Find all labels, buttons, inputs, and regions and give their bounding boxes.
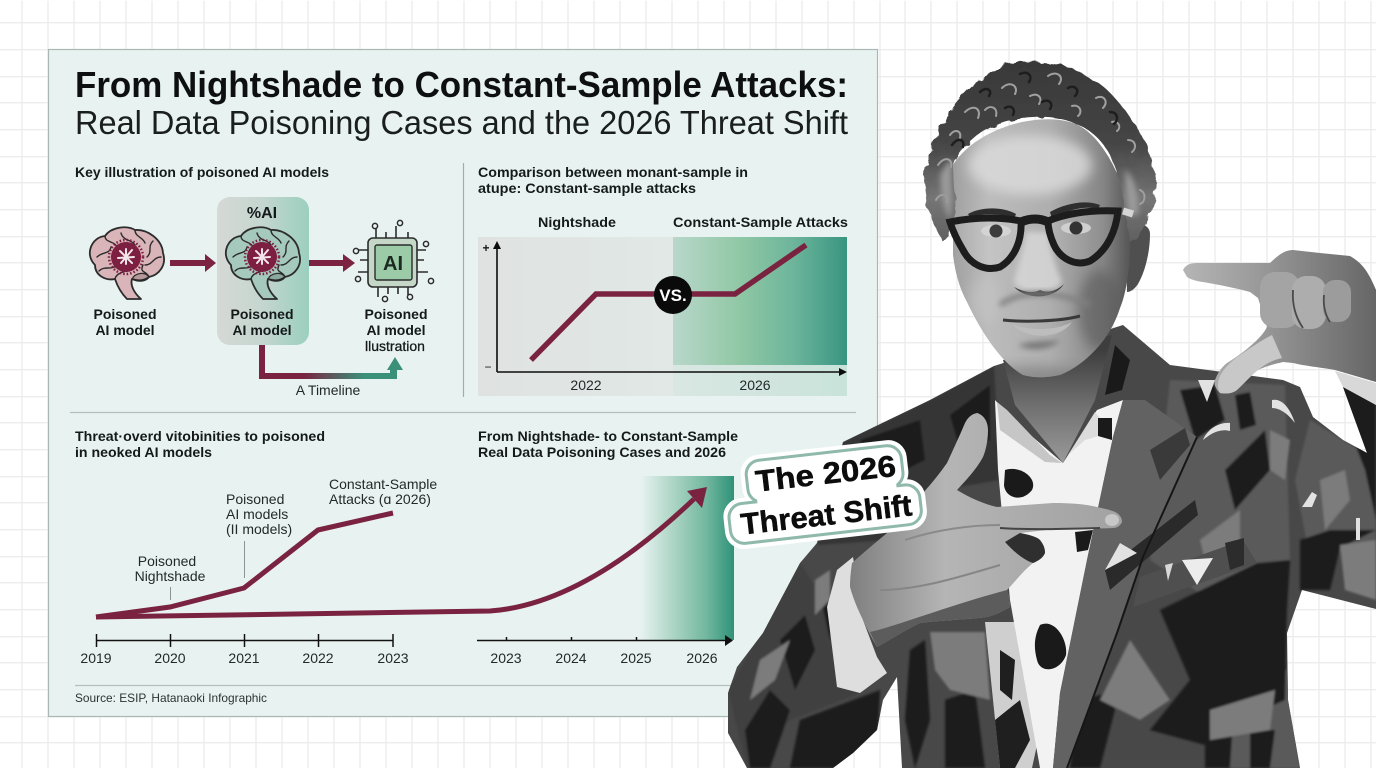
- source note: Source: ESIP, Hatanaoki Infographic: [75, 691, 267, 705]
- annotation: poisoned AI models: [226, 491, 292, 578]
- sticker: the 2026 threat shift: [721, 440, 925, 547]
- chart: comparison: [478, 214, 848, 396]
- arrow: brain to card: [170, 254, 216, 272]
- sticker: the 2026 threat shift: The 2026: [754, 450, 898, 499]
- shirt: [995, 345, 1130, 768]
- arrow: long-run curve: [96, 487, 707, 617]
- heading: comparison: Comparison between monant-sample in: [478, 164, 748, 180]
- eyebrows: [968, 202, 1100, 219]
- middle highlighted card: [217, 197, 309, 345]
- chart: comparison: −: [484, 360, 492, 374]
- axis: right years: [477, 635, 733, 666]
- arrow: card to chip: [309, 254, 355, 272]
- hair: [924, 61, 1156, 242]
- annotation: poisoned AI models: AI models: [226, 506, 288, 522]
- icon: AI chip: AI: [383, 253, 403, 275]
- mouth: [1000, 294, 1090, 349]
- axis: left years: 2023: [377, 650, 409, 666]
- label: first brain: Poisoned: [93, 306, 157, 322]
- jacket: [720, 320, 1376, 768]
- label: a timeline: A Timeline: [296, 382, 361, 398]
- label: nightshade: Nightshade: [538, 214, 616, 230]
- badge: versus: VS.: [659, 286, 687, 305]
- heading: nightshade to constant-sample: From Nightshade- to Constant-Sample: [478, 428, 738, 444]
- axis: left years: 2019: [80, 650, 112, 666]
- title: From Nightshade to Constant-Sample Attacks:: [75, 64, 848, 105]
- label: second brain: AI model: [232, 322, 292, 338]
- footer divider: [75, 684, 740, 686]
- heading: key illustration: Key illustration of poisoned AI models: [75, 164, 329, 180]
- axis: right years: 2023: [490, 650, 522, 666]
- arrow: timeline elbow: [259, 345, 403, 379]
- raised hand cuff: [1335, 371, 1376, 405]
- neck: [1003, 335, 1112, 463]
- chart: comparison: +: [482, 241, 490, 255]
- label: chip: AI model: [366, 322, 426, 338]
- annotation: constant-sample attacks: Constant-Sample: [329, 476, 437, 492]
- pocket square: [1133, 538, 1257, 607]
- eyes: [981, 222, 1091, 238]
- nose: [1014, 232, 1062, 292]
- band: 2026 shift: [640, 476, 734, 640]
- label: year 2022: 2022: [570, 377, 602, 393]
- thumb highlight: [1218, 335, 1282, 394]
- left collar: [997, 402, 1062, 463]
- portrait: presenter: [720, 61, 1376, 768]
- shirt flowers: [1004, 345, 1130, 669]
- left cuff: [827, 557, 887, 693]
- axis: right years: 2024: [555, 650, 587, 666]
- chart: threat timeline: [80, 476, 734, 666]
- heading: threat overview: Threat·overd vitobinities to poisoned: [75, 428, 325, 444]
- axis: left years: 2021: [228, 650, 260, 666]
- sticker: the 2026 threat shift: Threat Shift: [739, 489, 914, 542]
- axis: right years: 2025: [620, 650, 652, 666]
- glasses: [950, 211, 1133, 268]
- title: [75, 64, 848, 141]
- label: percent AI: %AI: [247, 205, 277, 222]
- annotation: poisoned AI models: Poisoned: [226, 491, 284, 507]
- curled fingers: [1260, 272, 1351, 329]
- annotation: poisoned AI models: (II models): [226, 521, 292, 537]
- title: Real Data Poisoning Cases and the 2026 Threat Shift: [75, 104, 848, 141]
- raised hand: [1183, 250, 1376, 405]
- badge: versus: [654, 276, 692, 314]
- label: constant-sample attacks: Constant-Sample Attacks: [673, 214, 848, 230]
- label: chip: Poisoned: [364, 306, 428, 322]
- curled finger shadow: [1005, 533, 1045, 563]
- hair curly edge: [924, 61, 1156, 242]
- label: year 2026: 2026: [739, 377, 771, 393]
- heading: nightshade to constant-sample: Real Data Poisoning Cases and 2026: [478, 444, 726, 460]
- axis: right years: 2026: [686, 650, 718, 666]
- panel: infographic card: [48, 50, 878, 716]
- annotation: constant-sample attacks: Attacks (ɑ 2026): [329, 491, 431, 507]
- heading: threat overview: in neoked AI models: [75, 444, 212, 460]
- icon: poisoned brain two: [226, 227, 300, 299]
- label: chip: llustration: [365, 338, 425, 354]
- heading: comparison: atupe: Constant-sample attacks: [478, 180, 696, 196]
- annotation: poisoned nightshade: Nightshade: [135, 568, 206, 584]
- line: threat trajectory: [531, 245, 806, 360]
- axis: left years: [80, 634, 409, 666]
- vertical divider: [462, 163, 464, 397]
- axis: left years: 2022: [302, 650, 334, 666]
- temple grey: [940, 160, 953, 220]
- icon: poisoned brain one: [90, 227, 164, 299]
- panel: poisoned model flow: [90, 197, 434, 398]
- annotation: poisoned nightshade: Poisoned: [138, 553, 196, 569]
- white jacket motifs: [1198, 380, 1360, 540]
- hair base: [928, 65, 1152, 242]
- axis: left years: 2020: [154, 650, 186, 666]
- jacket lapel: [1053, 400, 1198, 768]
- pointing hand: [850, 413, 1122, 647]
- ear: [1126, 222, 1150, 292]
- face: [953, 119, 1130, 390]
- annotation: poisoned nightshade: [135, 553, 206, 600]
- line: early growth: [96, 513, 393, 617]
- label: first brain: AI model: [95, 322, 155, 338]
- label: second brain: Poisoned: [230, 306, 294, 322]
- icon: AI chip: [353, 220, 434, 302]
- horizontal divider: [70, 412, 856, 414]
- shirt-side floral panel: [985, 622, 1037, 768]
